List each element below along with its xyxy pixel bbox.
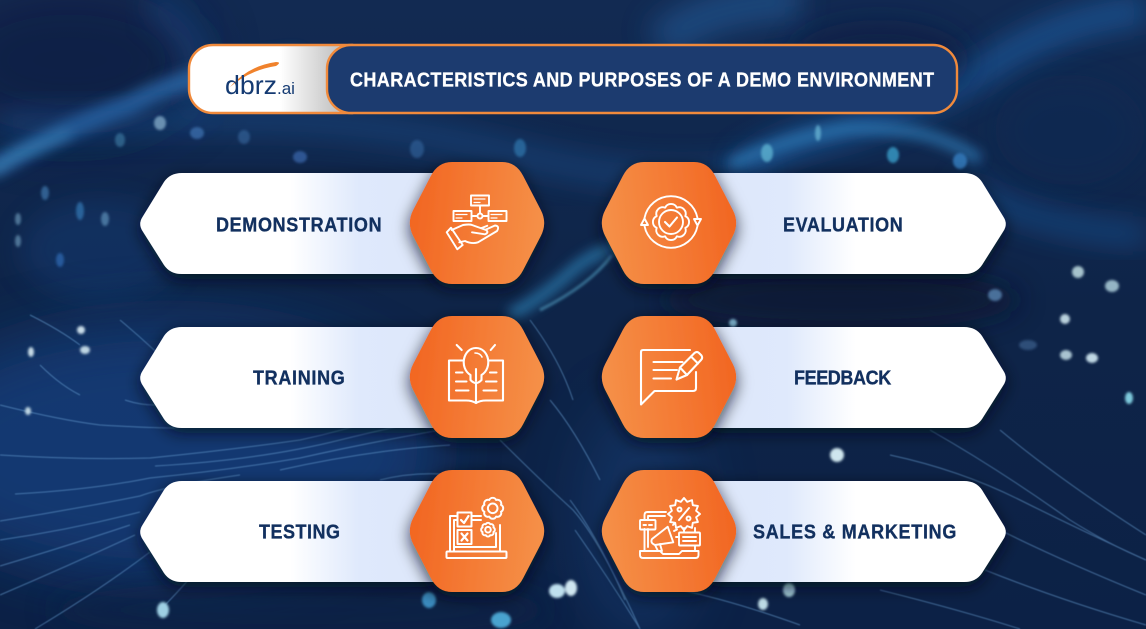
label: testing: TESTING bbox=[259, 522, 340, 544]
label: sales and marketing: SALES & MARKETING bbox=[753, 522, 956, 544]
logo: dbrz.ai bbox=[225, 62, 295, 100]
logo: dbrz.ai: dbrz bbox=[225, 70, 277, 100]
label: training: TRAINING bbox=[253, 368, 345, 390]
panel: feedback bbox=[602, 316, 1006, 438]
hexagon: testing bbox=[410, 470, 544, 592]
icon: gear with check and cycle arrows bbox=[641, 196, 701, 248]
panel: demonstration bbox=[140, 162, 544, 284]
header: logo badge bbox=[189, 45, 352, 113]
panel: testing bbox=[140, 470, 544, 592]
label: demonstration: DEMONSTRATION bbox=[216, 215, 382, 237]
hexagon: feedback bbox=[602, 316, 736, 438]
icon: laptop with megaphone and discount badge bbox=[640, 498, 700, 558]
panel: training bbox=[140, 316, 544, 438]
label: evaluation: EVALUATION bbox=[783, 215, 903, 237]
hexagon: training bbox=[410, 316, 544, 438]
icon: speech bubble with pencil bbox=[641, 350, 702, 404]
icon: laptop checklist with gears bbox=[446, 498, 506, 558]
icon: open book with light bulb bbox=[449, 345, 503, 403]
logo: dbrz.ai: .ai bbox=[277, 79, 295, 98]
label: feedback: FEEDBACK bbox=[794, 368, 891, 390]
hexagon: evaluation bbox=[602, 162, 736, 284]
header: title banner bbox=[327, 45, 957, 113]
hexagon: demonstration bbox=[410, 162, 544, 284]
title: CHARACTERISTICS AND PURPOSES OF A DEMO ENVIRONMENT bbox=[350, 70, 934, 92]
panel: sales and marketing bbox=[602, 470, 1006, 592]
icon: hand holding flowchart bbox=[447, 196, 506, 249]
hexagon: sales and marketing bbox=[602, 470, 736, 592]
panel: evaluation bbox=[602, 162, 1006, 284]
